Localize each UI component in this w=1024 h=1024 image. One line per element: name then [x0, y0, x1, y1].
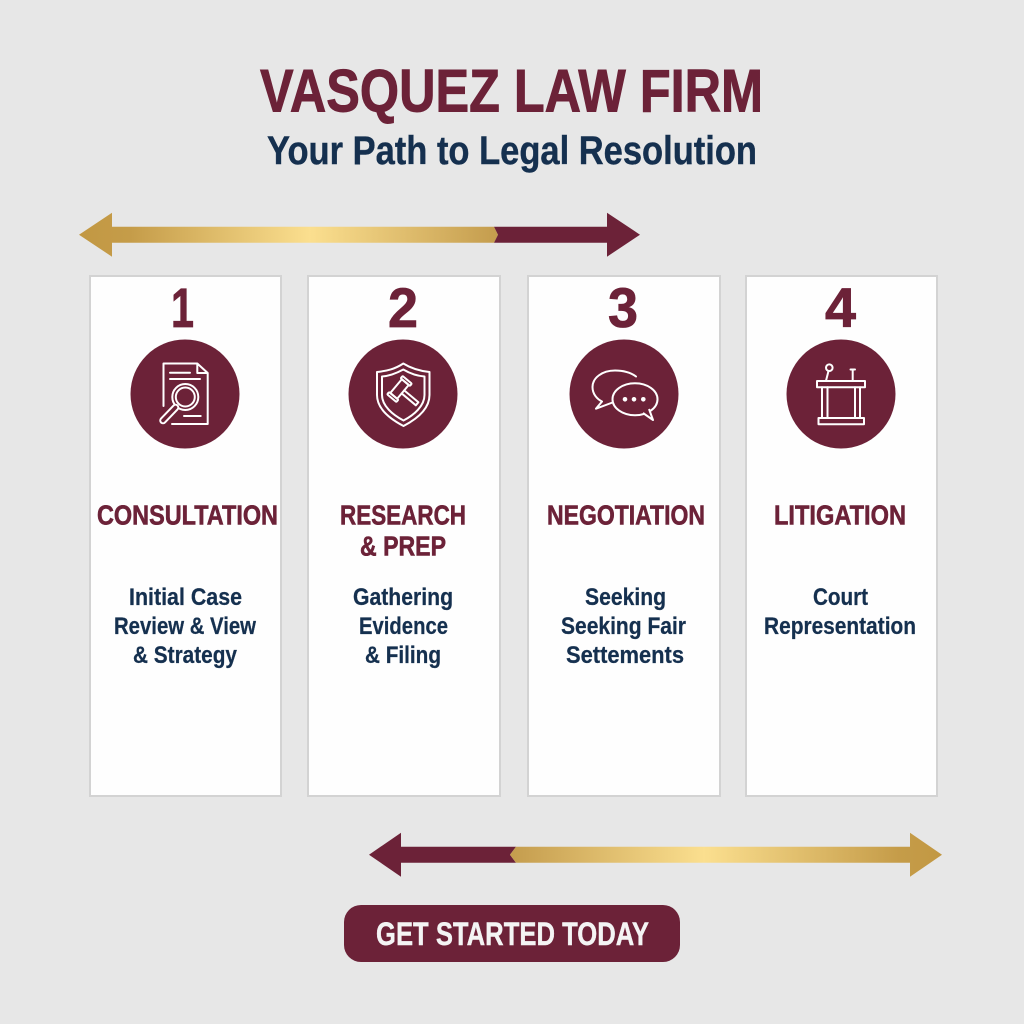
description: research and prep: Gathering [353, 584, 453, 611]
label: litigation: LITIGATION [774, 500, 906, 530]
icon: shield with gavel [348, 340, 458, 448]
panel: step 3 negotiation [528, 276, 720, 796]
label: research and prep: & PREP [360, 530, 446, 562]
description: research and prep [353, 584, 453, 669]
icon: podium [786, 340, 896, 448]
subtitle: Your Path to Legal Resolution [267, 129, 757, 173]
panel: step 2 research and prep [308, 276, 500, 796]
button: get started today: GET STARTED TODAY [376, 916, 649, 952]
description: litigation: Court [813, 584, 868, 611]
step number 2: 2 [388, 276, 418, 339]
panel: step 1 consultation [90, 276, 281, 796]
description: negotiation: Settements [566, 642, 684, 669]
step number 3: 3 [608, 276, 638, 339]
description: negotiation [561, 584, 686, 669]
description: consultation [114, 584, 256, 669]
label: consultation: CONSULTATION [97, 500, 278, 530]
description: negotiation: Seeking Fair [561, 613, 686, 640]
arrow: top double-headed [79, 213, 640, 257]
description: research and prep: & Filing [365, 642, 441, 669]
button: get started today [344, 905, 680, 962]
arrow: bottom double-headed [369, 833, 942, 877]
icon: document with magnifier [130, 340, 240, 448]
description: litigation [764, 584, 916, 640]
description: litigation: Representation [764, 613, 916, 640]
title: VASQUEZ LAW FIRM [260, 58, 763, 124]
label: research and prep: RESEARCH [340, 500, 466, 530]
label: negotiation: NEGOTIATION [547, 500, 705, 530]
step number 4: 4 [825, 276, 856, 339]
description: consultation: Initial Case [129, 584, 242, 611]
panel: step 4 litigation [746, 276, 937, 796]
description: consultation: Review & View [114, 613, 256, 640]
step number 1: 1 [171, 276, 194, 339]
icon: speech bubbles [570, 340, 678, 448]
description: negotiation: Seeking [585, 584, 666, 611]
description: consultation: & Strategy [133, 642, 238, 669]
description: research and prep: Evidence [359, 613, 448, 640]
label: research and prep [340, 500, 466, 562]
